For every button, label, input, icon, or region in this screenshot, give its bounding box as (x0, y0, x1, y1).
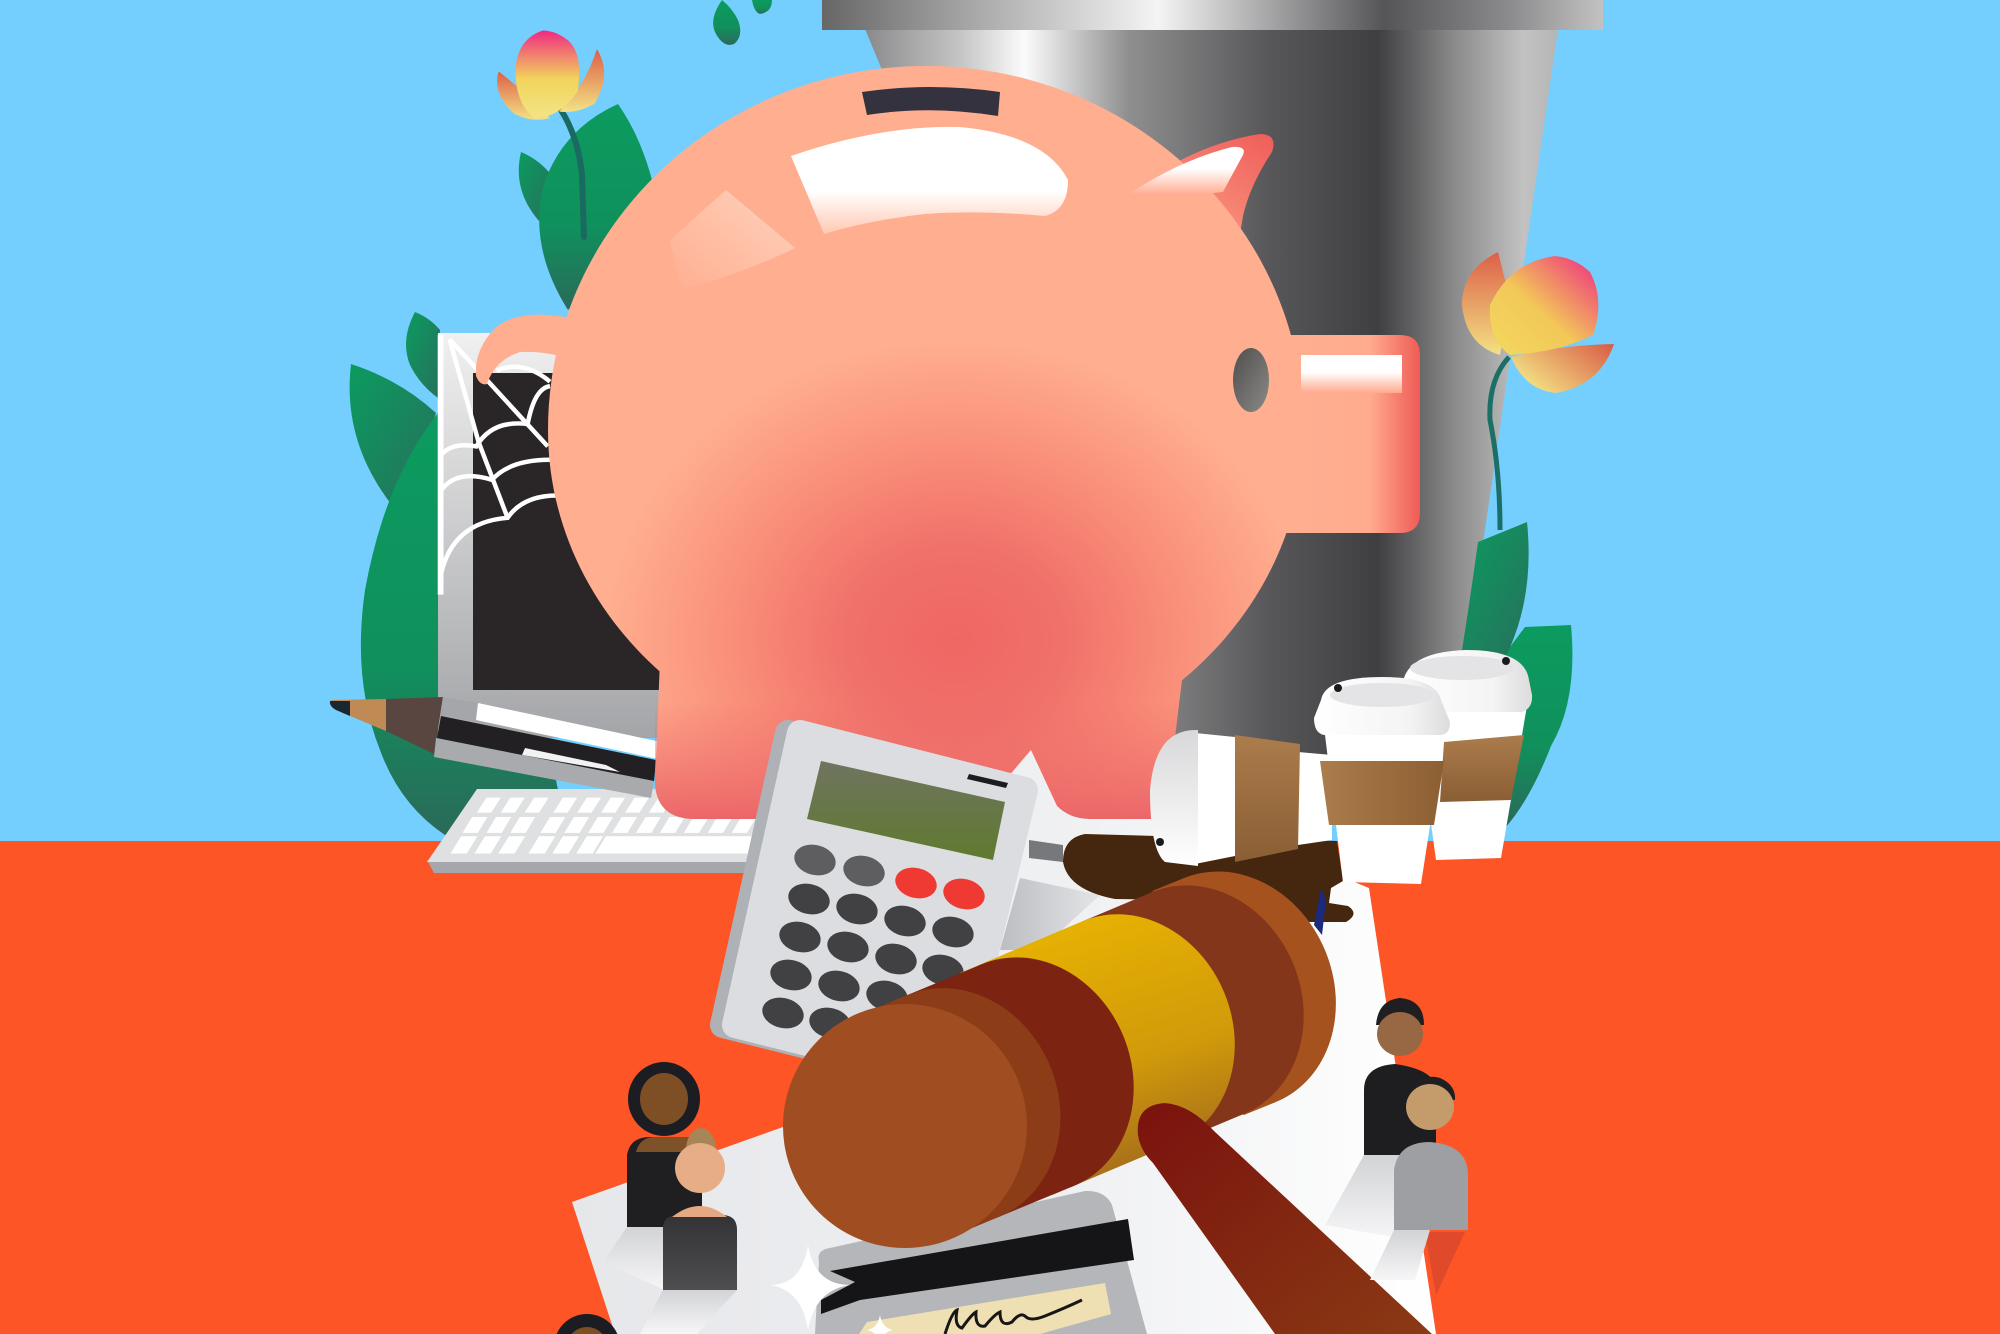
sparkle small (867, 1315, 893, 1334)
person: back hair (628, 1062, 700, 1136)
gray shadow patch (1000, 878, 1100, 950)
person: front hair (1404, 1077, 1455, 1100)
person: bottom hair (554, 1314, 620, 1334)
pig ear (1120, 134, 1274, 280)
coin slot (862, 87, 1000, 116)
top highlight (791, 127, 1068, 234)
laptop frame (438, 333, 708, 738)
gavel brown band (810, 955, 1096, 1257)
leaf: small upper (406, 312, 440, 398)
floor shadow (1325, 1155, 1410, 1240)
person: front body (663, 1215, 737, 1290)
stem (559, 107, 584, 237)
back cup hole (1502, 657, 1510, 665)
pig snout (1270, 335, 1420, 533)
people: right group (1325, 998, 1468, 1280)
can body (865, 29, 1558, 780)
leaf: front (1462, 522, 1529, 660)
leaf: back (1470, 625, 1572, 828)
laptop display (473, 373, 703, 690)
gavel (783, 839, 1432, 1334)
person: front hair (686, 1128, 716, 1172)
flower (1462, 252, 1614, 393)
sparkle (770, 1245, 850, 1330)
person: front face (1406, 1084, 1454, 1130)
middle cup hole (1334, 684, 1342, 692)
piggy bank (476, 66, 1420, 819)
gavel dark band (1057, 853, 1339, 1153)
ear highlight (1129, 147, 1244, 196)
side highlight (670, 190, 795, 290)
flower (497, 30, 604, 120)
snout highlight (1301, 355, 1402, 393)
person: rear hair (1376, 998, 1424, 1025)
gavel yellow band (960, 914, 1235, 1195)
floor shadow (603, 1227, 665, 1290)
paper sheet (572, 750, 1465, 1334)
orange shadow (1425, 1232, 1465, 1295)
gavel handle (1138, 1103, 1432, 1334)
person: back face (640, 1073, 688, 1125)
person: rear face (1377, 1012, 1423, 1056)
person: front neck (672, 1206, 727, 1217)
keyboard deck (427, 789, 770, 862)
metal trash can (822, 0, 1603, 780)
leaf: large (539, 104, 660, 310)
middle cup lid (1314, 677, 1450, 735)
middle cup (1314, 677, 1450, 884)
pig lower shading (655, 700, 1180, 819)
back cup lid (1401, 650, 1532, 712)
plant behind pig with flower (497, 30, 660, 310)
calculator side (723, 733, 1013, 1080)
keyboard (427, 789, 770, 873)
pencil stripes (440, 697, 480, 720)
calculator display (807, 761, 1005, 860)
pencil tip (331, 699, 390, 731)
gavel red band (887, 925, 1169, 1225)
lying cup lid (1150, 730, 1198, 866)
card body (815, 1191, 1147, 1334)
can lid (822, 0, 1603, 30)
card stripe (821, 1219, 1134, 1314)
middle cup sleeve (1320, 761, 1444, 825)
left plant leaves behind laptop (350, 312, 560, 835)
people: left group (554, 1062, 737, 1334)
pencil collar (386, 697, 443, 754)
person: rear body (1364, 1064, 1436, 1155)
lying cup hole (1156, 838, 1164, 846)
calculator buttons (759, 840, 988, 1043)
lying cup sleeve (1235, 735, 1300, 862)
bank card (770, 1191, 1147, 1334)
calculator (723, 733, 1025, 1080)
pig eye (1233, 348, 1269, 412)
leaf: small (519, 152, 552, 221)
back cup sleeve (1440, 735, 1524, 802)
leaf: large front (361, 413, 560, 835)
right plant (1462, 252, 1614, 828)
gavel face (783, 1004, 1027, 1248)
stem (1490, 357, 1509, 530)
background: orange floor (0, 841, 2000, 1334)
solar slot (967, 774, 1008, 788)
spider web (441, 335, 557, 595)
calculator face (735, 733, 1025, 1080)
laptop screen (438, 333, 708, 738)
back cup (1401, 650, 1532, 860)
keyboard keys (451, 798, 759, 854)
keyboard front edge (427, 860, 760, 873)
back cup lid recess (1410, 656, 1514, 680)
lying cup body (1195, 733, 1235, 864)
background: sky (0, 0, 2000, 842)
blue pen fragment (1314, 888, 1326, 935)
person: bottom face (566, 1327, 608, 1334)
sheet (572, 750, 1436, 1334)
connector bar (1029, 840, 1063, 862)
person: back body (627, 1137, 702, 1227)
pig tail (476, 315, 590, 384)
leaf: big rear (350, 364, 436, 504)
middle cup lid recess (1330, 683, 1434, 707)
person: shoulders (636, 1137, 690, 1152)
lying cup (1150, 730, 1332, 866)
pig body and feet (548, 66, 1304, 819)
falling leaves at top (713, 0, 772, 45)
gavel end cap (1088, 839, 1372, 1141)
pencil (330, 697, 661, 798)
person: front face (675, 1143, 725, 1193)
coffee cups (1150, 650, 1532, 884)
person: front body (1394, 1142, 1468, 1230)
signature panel (859, 1283, 1111, 1334)
coffee spill (1063, 834, 1354, 935)
signature (945, 1300, 1082, 1334)
